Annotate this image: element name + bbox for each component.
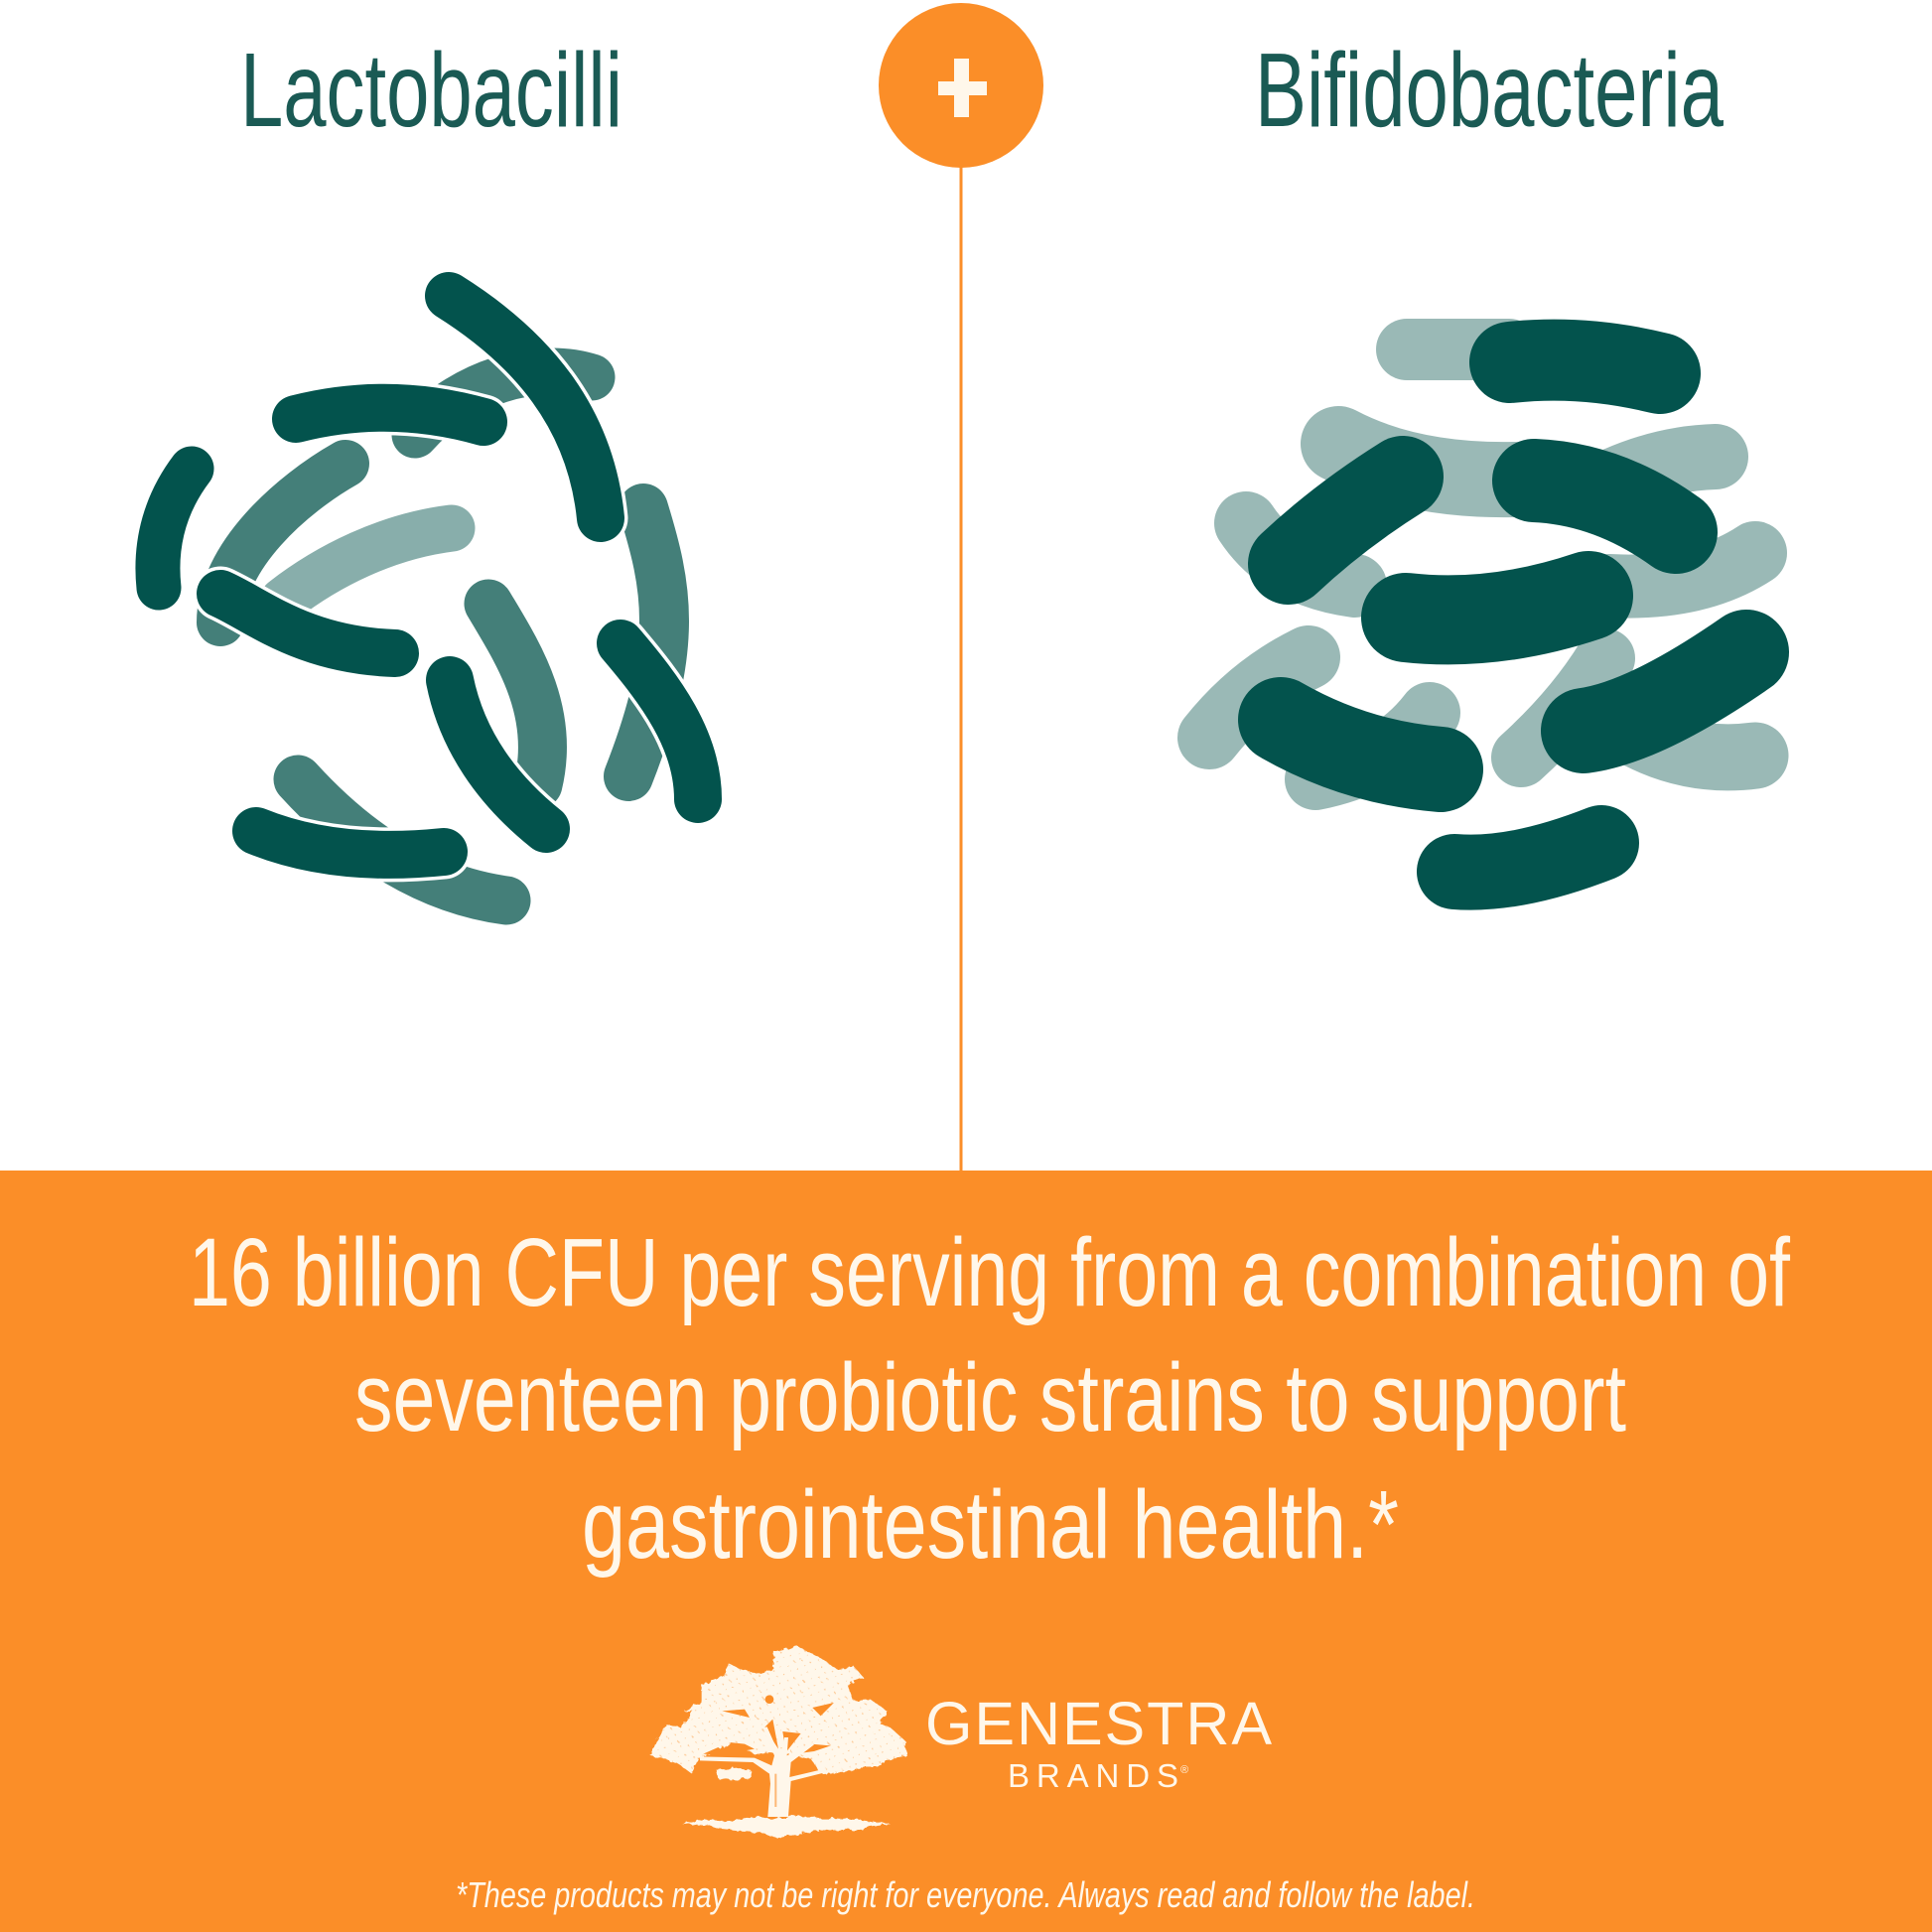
text block: main claim: gastrointestinal health.* [582,1470,1399,1579]
footnote disclaimer: *These products may not be right for everyone. Always read and follow the label. [456,1874,1475,1915]
logo wordmark: GENESTRA BRANDS: ® [1180,1764,1188,1776]
divider line [959,159,963,1173]
panel: orange footer [0,1171,1932,1932]
text block: main claim [189,1218,1791,1579]
heading: Bifidobacteria: Bifidobacteria [1255,32,1724,149]
illustration: lactobacilli cluster [158,296,698,900]
illustration: bifidobacteria cluster [1209,349,1755,873]
icon: Genestra tree logo [650,1646,906,1839]
heading: Lactobacilli: Lactobacilli [240,32,622,149]
logo wordmark: GENESTRA BRANDS: BRANDS [1008,1757,1178,1794]
logo wordmark: GENESTRA BRANDS: GENESTRA [925,1690,1272,1757]
icon: orange plus badge [879,3,1043,168]
text block: main claim: seventeen probiotic strains to support [354,1343,1626,1451]
logo wordmark: GENESTRA BRANDS [925,1690,1272,1794]
